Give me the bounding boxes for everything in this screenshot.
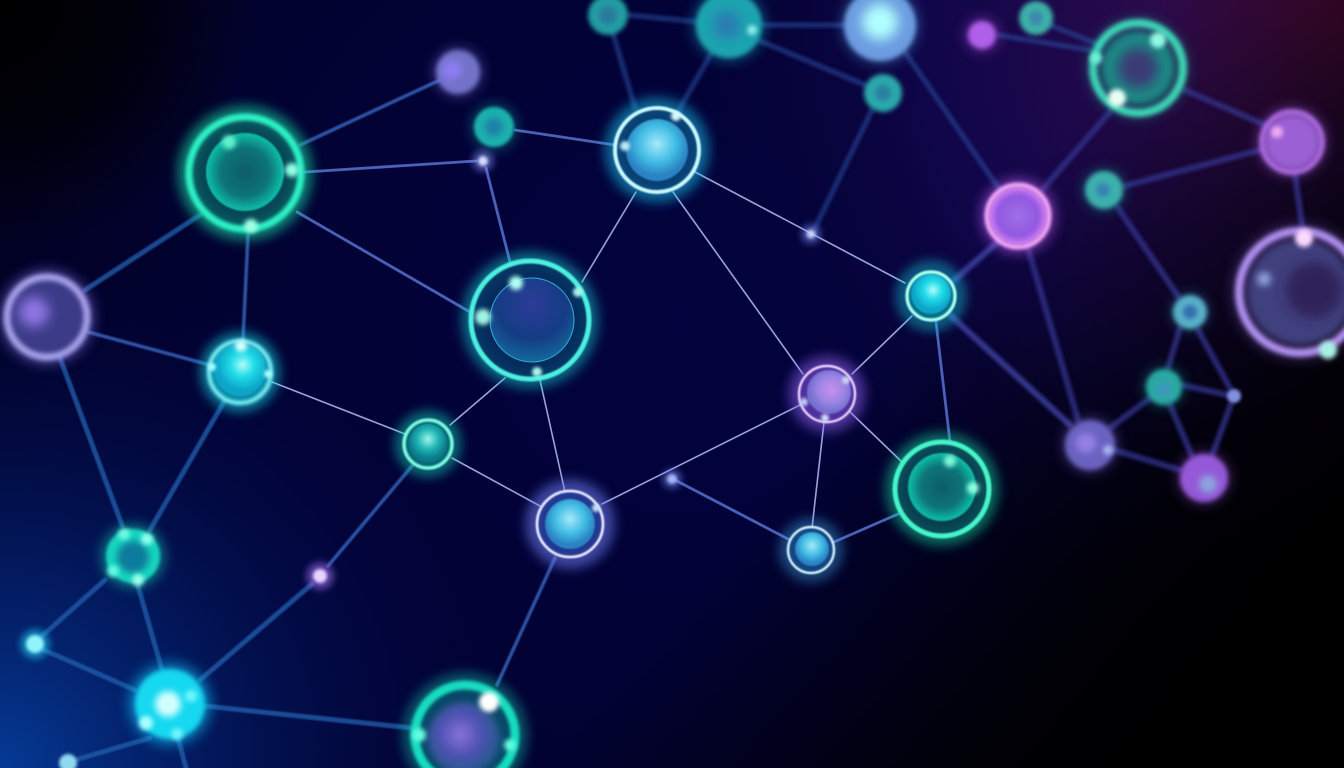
node: large cyan ring, centre [471,261,589,379]
node: small blue [472,150,494,172]
node: cyan ring, left [208,340,272,404]
node: small cyan, bottom edge [59,754,77,768]
node: lavender blurred, left edge [0,269,95,365]
node: teal, top centre left [470,103,518,151]
node: white ring lavender, lower centre [534,488,606,560]
node: teal small, right [1142,365,1186,409]
node: teal small, upper right [1081,167,1127,213]
node: large teal and violet, bottom [411,681,519,768]
node: blue teal small, right [1170,292,1210,332]
node: teal, lower left [101,524,165,588]
node: purple bright, upper right [980,178,1056,254]
node: small cyan, far left [20,629,50,659]
node: tiny blue, centre [662,469,682,489]
node: tiny lavender, right [1227,389,1241,403]
node: large green ring, lower right [894,441,990,537]
node: tiny blue, upper centre [801,224,821,244]
node: magenta small, top [963,16,1001,54]
node: white ring cyan, top centre [613,106,701,194]
node: small purple, lower left [306,562,334,590]
node: bright cyan, bottom left [128,662,212,746]
node: lavender, top centre left [432,46,484,98]
node: cyan ring, right [903,268,959,324]
node: light cyan, top [840,0,920,65]
node: teal, top centre [691,0,767,63]
connections: sharp foreground links [272,130,950,542]
node: teal small, top [1019,1,1053,35]
node: teal, top under light cyan [864,74,902,112]
node: purple, top right [1256,106,1328,178]
node: purple, right [1176,450,1232,506]
node: large lavender blurred, right edge [1230,222,1344,362]
node: teal ring, centre left [402,418,454,470]
node: teal, top edge [588,0,628,35]
node: purple white ring, centre right [789,356,865,432]
node: large green ring, upper left [187,115,303,233]
node: small sky ring, lower centre [786,525,836,575]
node: lavender, right [1061,416,1119,474]
node: large teal blurred, top right [1086,16,1190,120]
